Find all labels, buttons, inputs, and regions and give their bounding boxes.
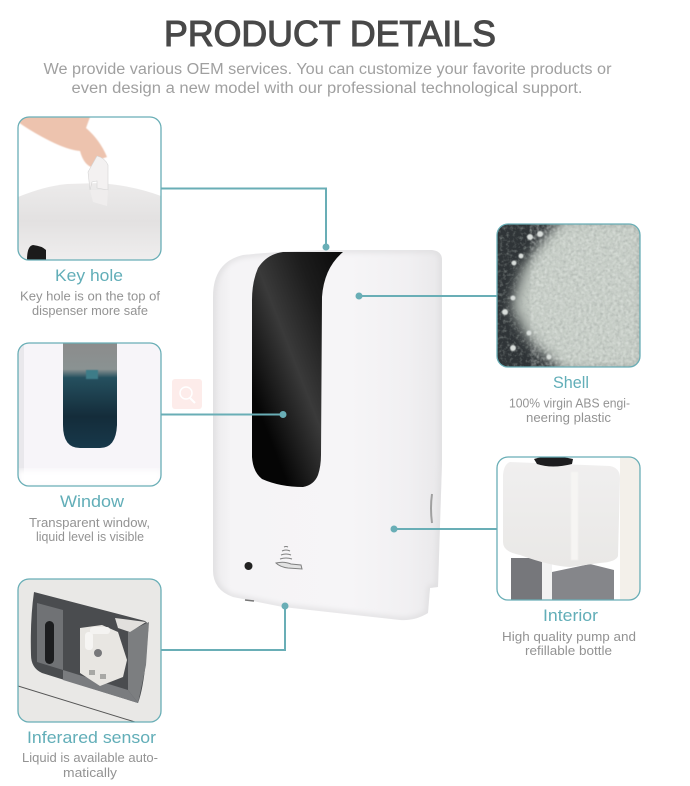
product: soap dispenser xyxy=(213,250,442,620)
sensor hole xyxy=(244,562,252,570)
bottle xyxy=(503,462,620,567)
black window xyxy=(27,245,46,260)
panel: window xyxy=(18,343,161,544)
description xyxy=(29,516,150,544)
heading: Inferared sensor xyxy=(27,728,156,747)
side slot xyxy=(431,494,432,523)
heading: Key hole xyxy=(55,266,123,285)
panel: key hole xyxy=(18,117,161,318)
connector: interior xyxy=(390,526,497,532)
zoom button xyxy=(172,379,202,409)
panel: inferared sensor xyxy=(18,579,161,780)
description xyxy=(22,751,158,780)
foot xyxy=(245,600,254,601)
connector: key hole xyxy=(161,188,330,250)
panel: shell xyxy=(497,218,646,425)
description: High quality pump and xyxy=(502,630,636,644)
dispenser window xyxy=(252,252,343,487)
cavity xyxy=(31,592,149,703)
subtitle: even design a new model with our professional technological support. xyxy=(72,80,582,97)
resin beads xyxy=(497,224,640,367)
hand wave icon xyxy=(276,546,302,569)
panel seam xyxy=(18,686,135,722)
connector: shell xyxy=(356,292,497,300)
description: Liquid is available auto- xyxy=(22,751,158,765)
left sensor housing xyxy=(37,603,63,670)
bottle cap xyxy=(534,456,573,466)
right wall xyxy=(128,622,149,703)
description: matically xyxy=(63,766,118,780)
floor xyxy=(63,670,138,703)
description: Transparent window, xyxy=(29,516,150,530)
description xyxy=(509,396,630,425)
description: neering plastic xyxy=(526,411,611,425)
liquid window xyxy=(63,343,117,448)
description: liquid level is visible xyxy=(36,530,144,544)
description xyxy=(20,290,161,318)
sensor slot xyxy=(45,621,54,664)
subtitle xyxy=(44,61,612,97)
description: dispenser more safe xyxy=(32,304,148,318)
key xyxy=(88,156,108,190)
pump housing xyxy=(511,558,542,600)
hand xyxy=(18,117,107,168)
title: PRODUCT DETAILS xyxy=(164,13,496,54)
heading: Window xyxy=(60,492,125,511)
description xyxy=(502,630,636,658)
connector: window xyxy=(161,411,286,418)
subtitle: We provide various OEM services. You can customize your favorite products or xyxy=(44,61,612,78)
connector: sensor xyxy=(161,602,288,650)
description: 100% virgin ABS engi- xyxy=(509,396,630,410)
panel: interior xyxy=(497,456,640,658)
heading: Shell xyxy=(553,373,589,392)
description: Key hole is on the top of xyxy=(20,290,161,304)
description: refillable bottle xyxy=(525,644,612,658)
pump block xyxy=(80,625,127,686)
heading: Interior xyxy=(543,606,598,625)
dispenser top xyxy=(18,183,161,260)
